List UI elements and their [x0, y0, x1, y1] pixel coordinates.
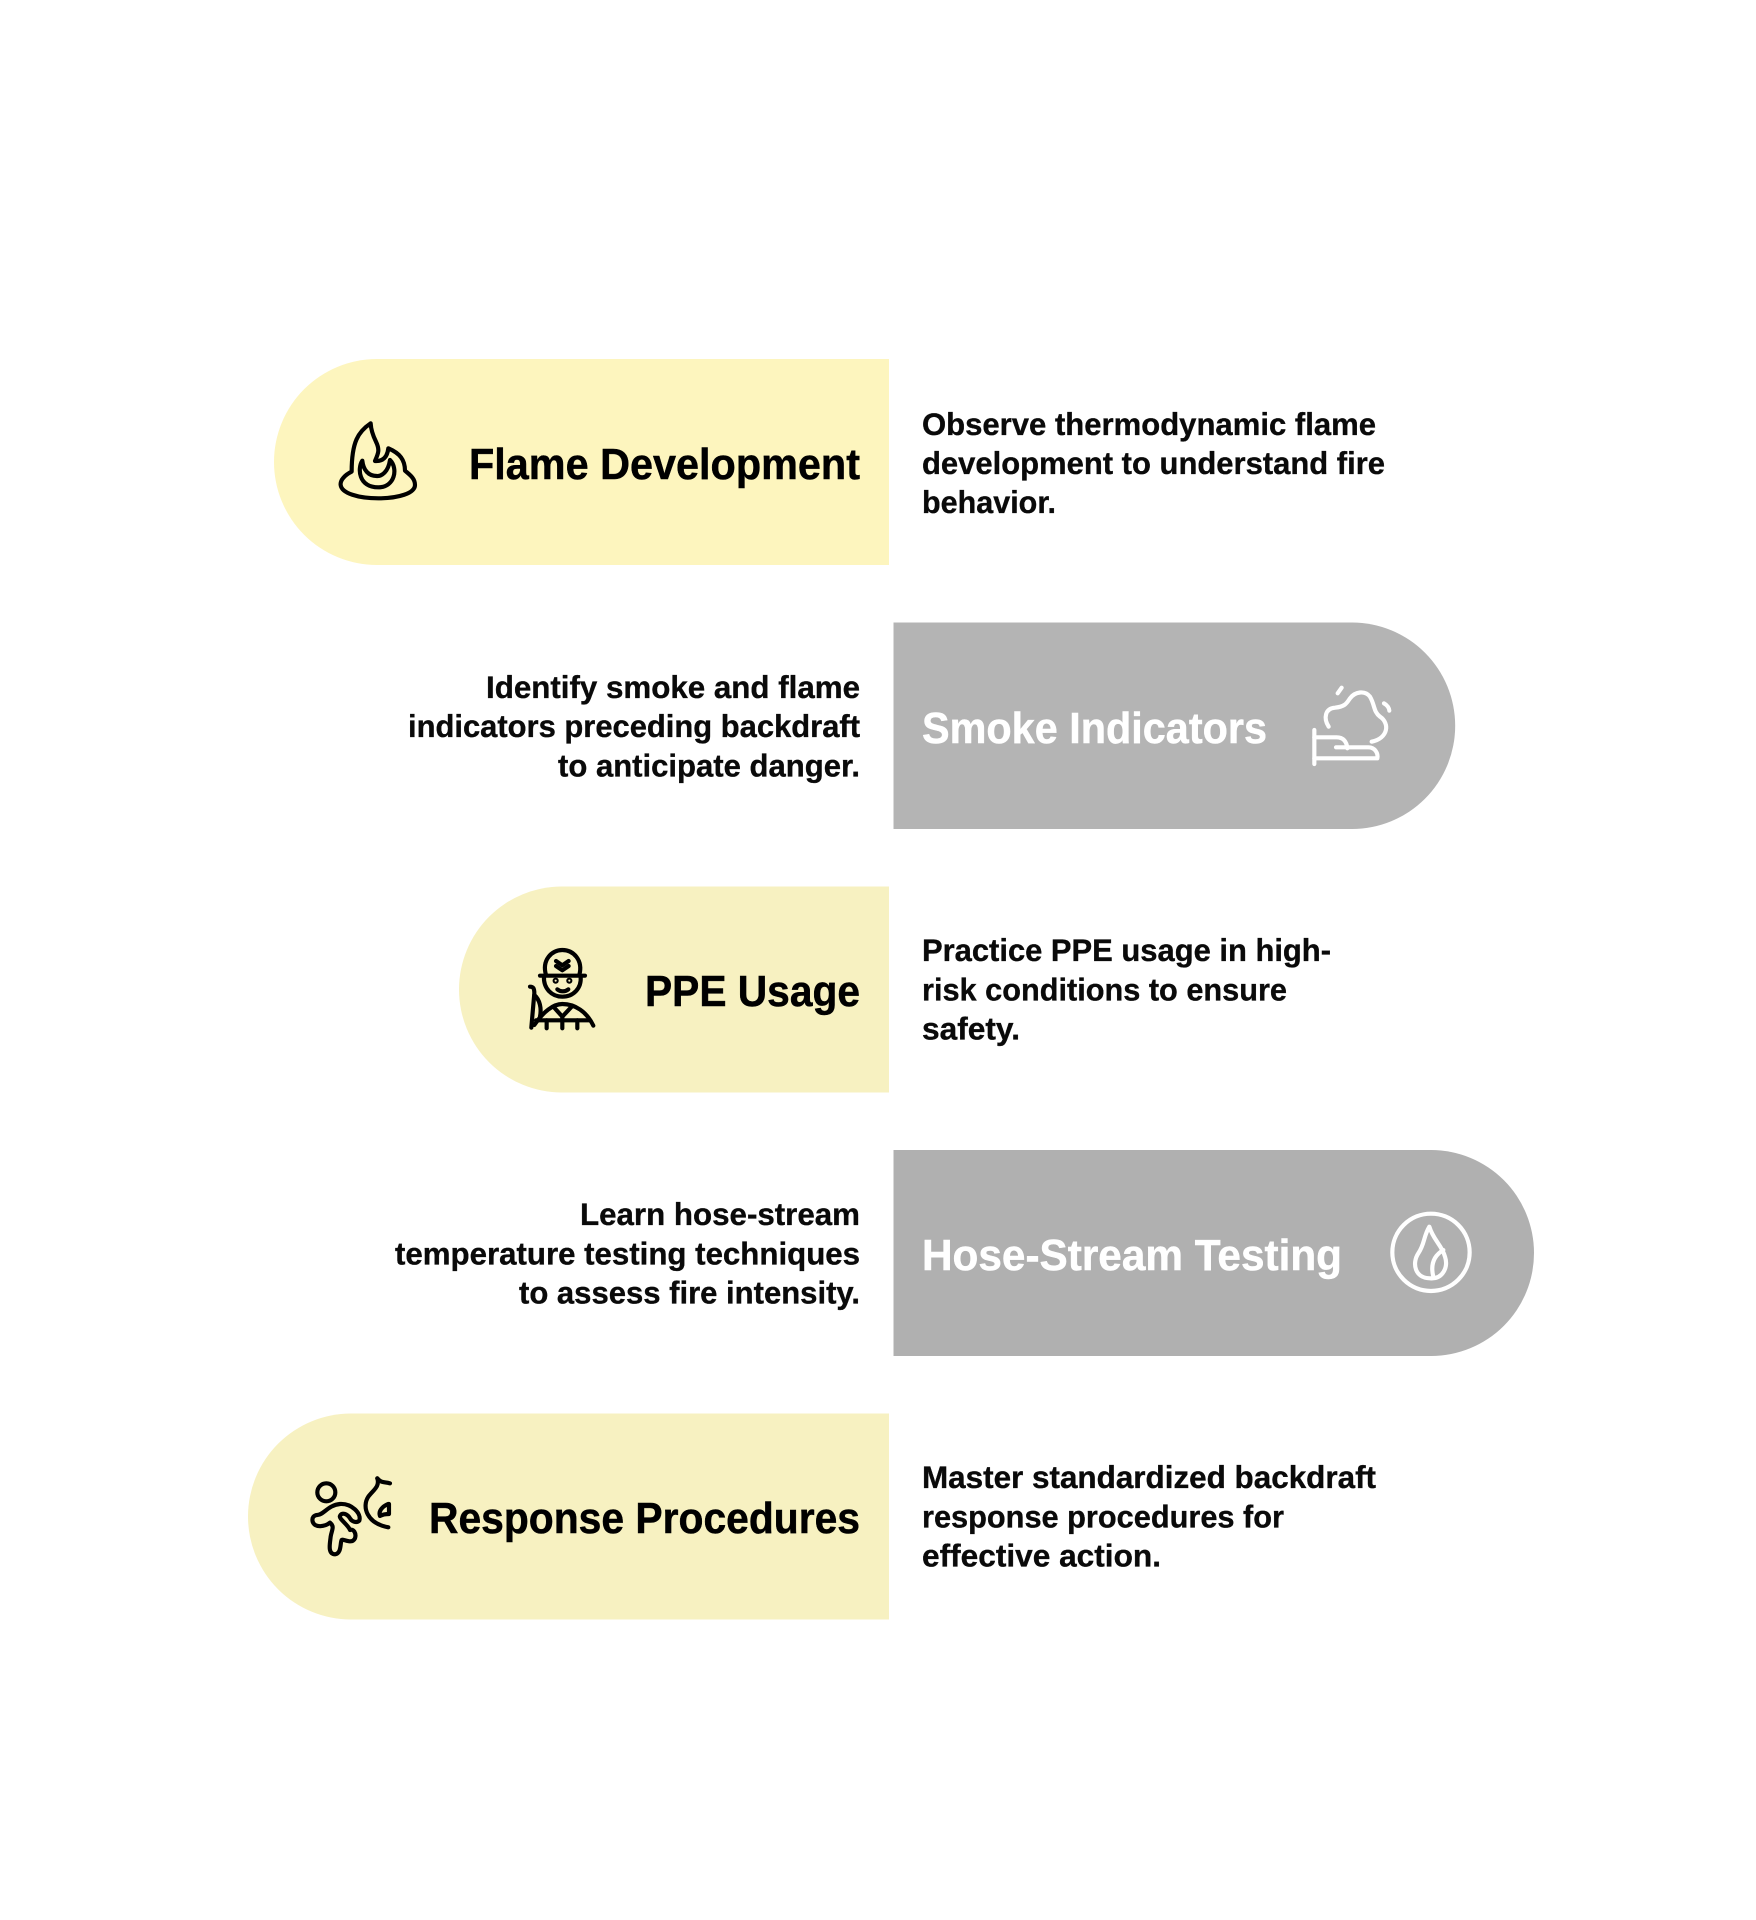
description: flame development: Observe thermodynamic flame: [922, 406, 1376, 442]
description: hose-stream testing: temperature testing techniques: [395, 1236, 860, 1272]
pill: smoke indicators: [894, 622, 1455, 829]
pill: flame development: [274, 359, 889, 565]
description: hose-stream testing: Learn hose-stream: [580, 1196, 860, 1232]
panel: response procedures: [248, 1414, 1377, 1620]
description: response procedures: [922, 1459, 1377, 1574]
heading: ppe usage: PPE Usage: [645, 967, 860, 1016]
description: smoke indicators: Identify smoke and flame: [486, 669, 860, 705]
heading: smoke indicators: Smoke Indicators: [922, 704, 1267, 753]
panel: ppe usage: [459, 886, 1331, 1092]
pill: hose-stream testing: [894, 1150, 1534, 1356]
description: smoke indicators: [408, 669, 860, 784]
icon: firefighter: [530, 950, 593, 1028]
heading: hose-stream testing: Hose-Stream Testing: [922, 1231, 1342, 1280]
pill: response procedures: [248, 1414, 889, 1620]
description: ppe usage: Practice PPE usage in high-: [922, 932, 1331, 968]
description: flame development: [922, 406, 1385, 520]
description: flame development: development to understand fire: [922, 445, 1385, 481]
icon: person running from fire: [312, 1478, 390, 1554]
heading: flame development: Flame Development: [469, 440, 860, 489]
description: response procedures: Master standardized backdraft: [922, 1459, 1377, 1495]
description: smoke indicators: indicators preceding backdraft: [408, 708, 860, 744]
description: hose-stream testing: [395, 1196, 860, 1310]
icon: smoke over hand: [1314, 688, 1389, 764]
description: flame development: behavior.: [922, 484, 1056, 520]
panel: flame development: [274, 359, 1385, 565]
panel: smoke indicators: [408, 622, 1455, 829]
pill: ppe usage: [459, 886, 889, 1092]
description: ppe usage: [922, 932, 1331, 1046]
description: smoke indicators: to anticipate danger.: [558, 748, 860, 784]
description: response procedures: effective action.: [922, 1538, 1161, 1574]
heading: response procedures: Response Procedures: [429, 1494, 860, 1543]
description: hose-stream testing: to assess fire intensity.: [519, 1274, 860, 1310]
icon: flame in circle: [1392, 1214, 1470, 1291]
description: response procedures: response procedures for: [922, 1498, 1284, 1534]
description: ppe usage: safety.: [922, 1010, 1020, 1046]
description: ppe usage: risk conditions to ensure: [922, 972, 1287, 1008]
icon: flame: [341, 423, 415, 498]
panel: hose-stream testing: [395, 1150, 1534, 1356]
